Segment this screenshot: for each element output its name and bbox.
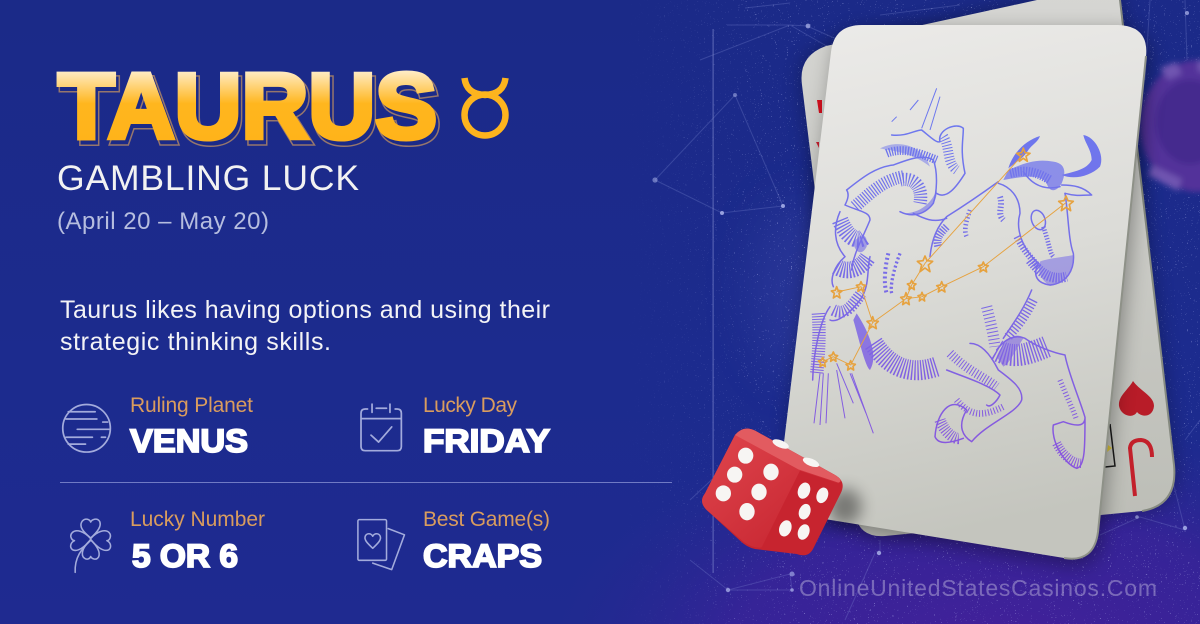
icon: planet (63, 404, 110, 452)
watermark: OnlineUnitedStatesCasinos.Com (799, 575, 1157, 601)
item: best games: Best Game(s) (423, 508, 550, 531)
title: TAURUS: TAURUS (61, 58, 440, 162)
icon: playing cards (358, 520, 404, 570)
hatching (814, 88, 1082, 463)
item: ruling planet (63, 394, 253, 459)
item: ruling planet: Ruling Planet (130, 394, 253, 417)
title: TAURUS: TAURUS (61, 58, 440, 162)
background (560, 0, 1200, 624)
icon: calendar (361, 404, 401, 451)
icon: red dice (702, 429, 862, 555)
subtitle: gambling luck: GAMBLING LUCK (57, 158, 359, 198)
item: lucky day: Lucky Day (423, 394, 518, 417)
item: best games: CRAPS (423, 538, 542, 574)
intro text: Taurus likes having options and using their (60, 296, 550, 324)
horizontal divider (60, 482, 672, 483)
icon: four-leaf clover (71, 519, 111, 572)
playing cards (779, 0, 1174, 565)
item: lucky number: 5 OR 6 (132, 538, 238, 574)
item: lucky number (71, 508, 265, 574)
intro text (60, 296, 550, 356)
date range: (April 20 – May 20) (57, 208, 269, 235)
illustration: taurus bull (813, 88, 1101, 468)
back card (802, 0, 1174, 536)
front card (779, 25, 1149, 565)
title: TAURUS: TAURUS (58, 54, 437, 158)
vertical divider (713, 29, 714, 573)
constellation (818, 148, 1073, 370)
icon: taurus symbol (464, 78, 506, 136)
item: ruling planet: VENUS (130, 423, 248, 459)
item: lucky number: Lucky Number (130, 508, 265, 531)
item: lucky day (361, 394, 550, 459)
outline strokes (813, 126, 1092, 468)
item: best games (358, 508, 550, 574)
card pips (817, 100, 822, 113)
item: lucky day: FRIDAY (423, 423, 550, 459)
intro text: strategic thinking skills. (60, 328, 331, 356)
bull fills (853, 135, 1101, 370)
poker chip (blurred) (1140, 60, 1200, 192)
